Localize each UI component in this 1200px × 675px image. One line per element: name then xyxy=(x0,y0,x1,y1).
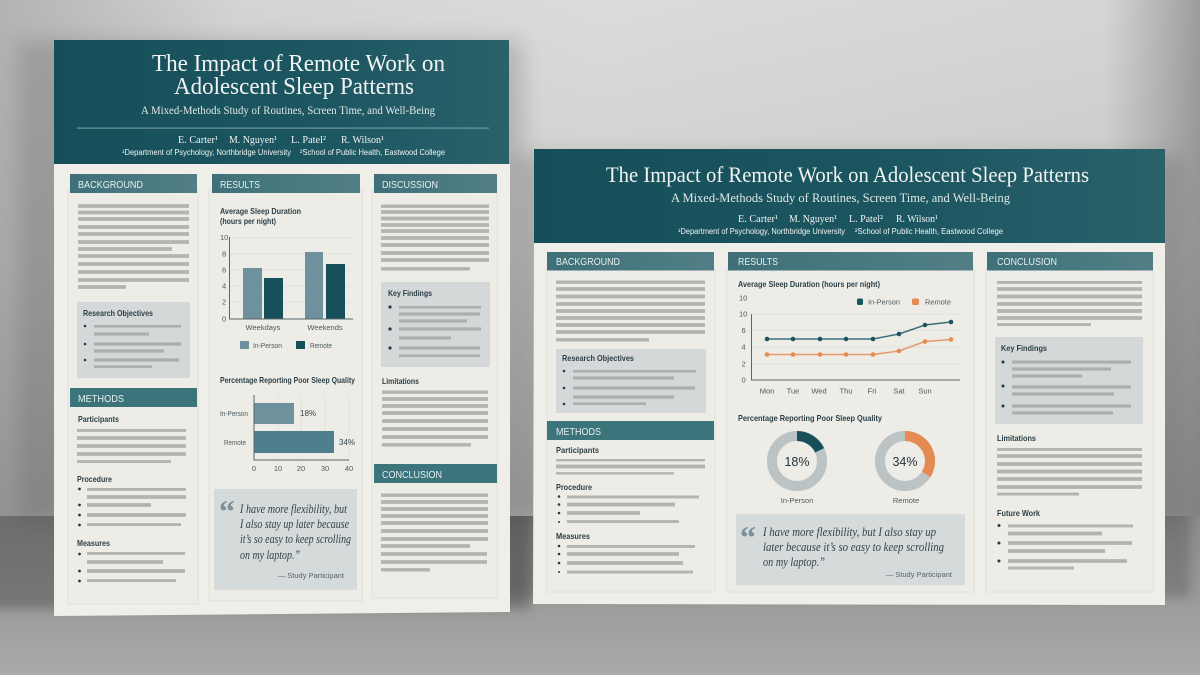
section heading: background: BACKGROUND xyxy=(78,180,143,191)
quote card: later because it’s so easy to keep scrolling xyxy=(763,540,944,554)
legend xyxy=(240,341,332,350)
section heading: methods: METHODS xyxy=(556,427,601,438)
legend: Remote xyxy=(925,298,951,306)
authors: M. Nguyen¹ xyxy=(229,134,277,146)
poster title: Adolescent Sleep Patterns xyxy=(174,73,414,100)
bar chart: poor sleep quality: In-Person xyxy=(220,409,248,418)
quote card: “ xyxy=(219,493,235,529)
section heading: methods: METHODS xyxy=(78,394,124,405)
section heading: results xyxy=(212,174,360,193)
authors: L. Patel² xyxy=(291,134,327,146)
section heading: results: RESULTS xyxy=(738,257,778,268)
affiliations: ¹Department of Psychology, Northbridge University xyxy=(678,227,845,236)
panel: background xyxy=(70,174,197,378)
measures xyxy=(77,538,185,582)
quote card: I have more flexibility, but xyxy=(239,502,347,516)
bar chart: poor sleep quality: 40 xyxy=(345,464,353,473)
limitations: Limitations xyxy=(382,376,419,386)
participants xyxy=(556,445,705,474)
line chart: average sleep duration: Average Sleep Duration (hours per night) xyxy=(738,279,880,289)
poster header banner xyxy=(54,40,509,164)
bar chart: average sleep duration xyxy=(220,206,353,350)
authors: M. Nguyen¹ xyxy=(789,213,837,225)
bar chart: average sleep duration: 2 xyxy=(222,298,226,306)
callout: research objectives: Research Objectives xyxy=(562,353,634,363)
donut: in-person 18%: 18% xyxy=(784,455,810,469)
section heading: conclusion xyxy=(987,252,1153,270)
line chart: average sleep duration: 10 xyxy=(739,310,747,318)
authors: E. Carter¹ xyxy=(738,213,778,225)
affiliations: ²School of Public Health, Eastwood College xyxy=(300,148,446,157)
poster sheet xyxy=(533,243,1165,605)
future work xyxy=(997,508,1133,568)
bar chart: poor sleep quality: 34% xyxy=(339,438,355,447)
callout: key findings xyxy=(381,282,490,367)
placeholder text: background xyxy=(78,206,189,287)
quote card: on my laptop.” xyxy=(240,548,300,562)
participants: Participants xyxy=(556,445,599,455)
authors xyxy=(738,213,938,225)
line chart: average sleep duration: Fri xyxy=(868,386,877,396)
bar chart: average sleep duration: Weekdays xyxy=(246,323,281,332)
poster header banner xyxy=(534,149,1165,243)
limitations xyxy=(382,376,488,445)
line chart: average sleep duration: Mon xyxy=(760,386,774,396)
future work: Future Work xyxy=(997,508,1040,518)
quote card xyxy=(736,514,965,585)
participants: Participants xyxy=(78,414,119,424)
bar chart: poor sleep quality: Percentage Reporting Poor Sleep Quality xyxy=(220,375,355,385)
bar chart: average sleep duration: 10 xyxy=(220,233,228,242)
placeholder text: discussion xyxy=(381,206,489,269)
donut: in-person 18% xyxy=(772,436,822,505)
line chart: average sleep duration: Tue xyxy=(787,386,799,396)
donut: remote 34%: Remote xyxy=(893,496,919,505)
bar chart: poor sleep quality: 10 xyxy=(274,464,282,473)
panel outlines xyxy=(68,190,497,604)
bar chart: poor sleep quality: 20 xyxy=(297,464,305,473)
section heading: methods xyxy=(547,421,714,440)
authors xyxy=(178,134,384,146)
procedure: Procedure xyxy=(556,482,592,492)
section heading: conclusion: CONCLUSION xyxy=(997,257,1057,268)
callout: research objectives xyxy=(77,302,190,378)
bar chart: average sleep duration: 0 xyxy=(222,314,226,324)
line chart: average sleep duration: 4 xyxy=(742,342,746,352)
bar chart: average sleep duration: (hours per night) xyxy=(220,216,276,226)
quote card xyxy=(214,489,357,590)
panel: conclusion xyxy=(987,252,1153,568)
section heading: results xyxy=(728,252,973,270)
procedure xyxy=(77,474,186,526)
line chart: average sleep duration xyxy=(738,279,960,396)
bar chart: average sleep duration: 6 xyxy=(222,266,226,274)
poster: portrait version xyxy=(54,40,510,616)
procedure xyxy=(556,482,699,523)
measures: Measures xyxy=(77,538,110,548)
participants xyxy=(77,414,186,462)
legend: In-Person xyxy=(868,298,900,306)
poster title: The Impact of Remote Work on Adolescent Sleep Patterns xyxy=(606,162,1089,187)
bar chart: average sleep duration: Average Sleep Duration xyxy=(220,206,301,216)
legend: Remote xyxy=(310,341,332,350)
authors: R. Wilson¹ xyxy=(896,213,938,225)
placeholder text: background xyxy=(556,282,705,340)
line chart: average sleep duration: Sat xyxy=(893,386,906,396)
placeholder text: conclusion xyxy=(381,495,488,570)
line chart: average sleep duration: 6 xyxy=(742,326,746,335)
poster title xyxy=(152,50,445,100)
callout: key findings: Key Findings xyxy=(388,288,432,298)
quote card: I also stay up later because xyxy=(239,517,349,531)
donut: in-person 18%: In-Person xyxy=(781,496,813,505)
donut charts: poor sleep quality: Percentage Reporting Poor Sleep Quality xyxy=(738,413,882,423)
donut: remote 34%: 34% xyxy=(892,455,918,469)
affiliations: ²School of Public Health, Eastwood College xyxy=(855,227,1004,236)
limitations: Limitations xyxy=(997,433,1036,443)
panel: results xyxy=(728,252,973,585)
donut: remote 34% xyxy=(880,436,930,505)
bar chart: poor sleep quality: 18% xyxy=(300,409,316,418)
authors: R. Wilson¹ xyxy=(341,134,384,146)
quote card: it’s so easy to keep scrolling xyxy=(240,532,351,546)
line chart: average sleep duration: Thu xyxy=(840,386,852,396)
quote card: — Study Participant xyxy=(886,570,953,579)
section heading: discussion xyxy=(374,174,497,193)
panel outlines xyxy=(547,268,1153,592)
section heading: background xyxy=(547,252,714,270)
poster: landscape version xyxy=(533,149,1165,605)
authors: E. Carter¹ xyxy=(178,134,218,146)
quote card: I have more flexibility, but I also stay up xyxy=(762,525,936,539)
donut charts: poor sleep quality xyxy=(738,413,930,505)
section heading: background xyxy=(70,174,197,193)
poster sheet xyxy=(54,164,510,616)
legend xyxy=(857,298,951,306)
procedure: Procedure xyxy=(77,474,112,484)
poster title: The Impact of Remote Work on xyxy=(152,50,445,77)
subtitle: A Mixed-Methods Study of Routines, Screen Time, and Well-Being xyxy=(141,103,435,117)
bar chart: poor sleep quality: Remote xyxy=(224,438,246,447)
bar chart: average sleep duration: 4 xyxy=(222,282,226,290)
quote card: “ xyxy=(740,519,756,555)
callout: research objectives: Research Objectives xyxy=(83,308,153,318)
section heading: methods xyxy=(70,388,197,407)
affiliations xyxy=(678,227,1004,236)
quote card: on my laptop.” xyxy=(763,555,825,569)
line chart: average sleep duration: 2 xyxy=(742,360,746,368)
subtitle: A Mixed-Methods Study of Routines, Screen Time, and Well-Being xyxy=(671,191,1011,205)
bar chart: poor sleep quality xyxy=(220,375,355,473)
quote card: — Study Participant xyxy=(278,571,345,580)
callout: key findings: Key Findings xyxy=(1001,343,1047,353)
legend: In-Person xyxy=(253,341,282,350)
panel: discussion xyxy=(374,174,497,445)
panel: background xyxy=(547,252,714,413)
placeholder text: conclusion xyxy=(997,282,1142,325)
measures: Measures xyxy=(556,531,590,541)
line chart: average sleep duration: 10 xyxy=(739,294,747,302)
section heading: conclusion: CONCLUSION xyxy=(382,470,442,481)
bar chart: poor sleep quality: 30 xyxy=(321,464,329,473)
series: remote xyxy=(765,337,953,357)
callout: key findings xyxy=(995,337,1143,424)
bar chart: poor sleep quality: 0 xyxy=(252,464,256,473)
panel: methods xyxy=(547,421,714,573)
section heading: discussion: DISCUSSION xyxy=(382,180,438,191)
affiliations: ¹Department of Psychology, Northbridge University xyxy=(122,148,291,157)
line chart: average sleep duration: Wed xyxy=(811,386,827,396)
panel: conclusion xyxy=(374,464,497,570)
series: in-person xyxy=(765,320,953,341)
measures xyxy=(556,531,695,573)
line chart: average sleep duration: 0 xyxy=(742,376,746,384)
callout: research objectives xyxy=(556,349,706,413)
limitations xyxy=(997,433,1142,494)
bar chart: average sleep duration: 8 xyxy=(222,250,226,258)
bar chart: average sleep duration: Weekends xyxy=(307,323,343,332)
panel: results xyxy=(212,174,360,590)
line chart: average sleep duration: Sun xyxy=(918,386,932,396)
affiliations xyxy=(122,148,446,157)
panel: methods xyxy=(70,388,197,582)
section heading: background: BACKGROUND xyxy=(556,257,620,268)
authors: L. Patel² xyxy=(849,213,884,225)
section heading: results: RESULTS xyxy=(220,180,260,191)
